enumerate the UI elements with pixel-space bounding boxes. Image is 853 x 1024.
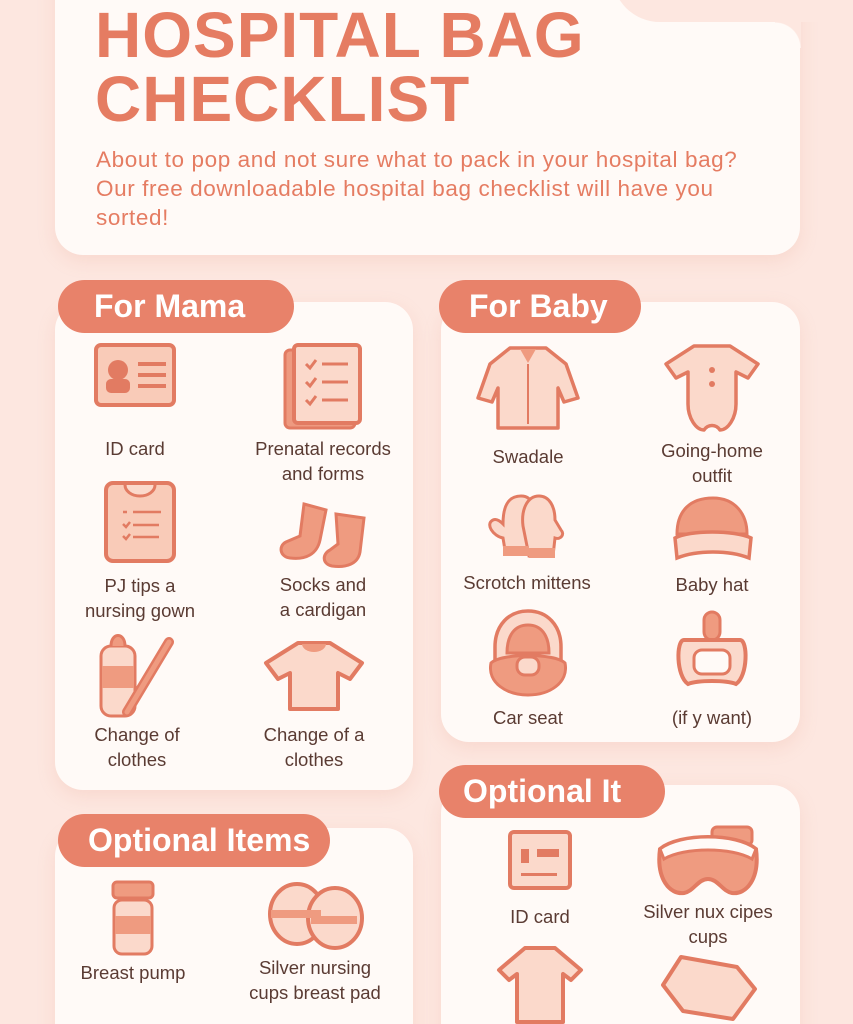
item: id card 2: ID card: [510, 906, 570, 927]
item: pj: nursing gown: [85, 600, 195, 621]
panel: optional items: [55, 828, 413, 1024]
item: prenatal records: and forms: [282, 463, 364, 484]
item: baby hat: Baby hat: [675, 574, 749, 595]
item: bottle and brush: Change of: [94, 724, 180, 745]
subtitle: About to pop and not sure what to pack in your hospital bag?: [96, 147, 737, 172]
item: baby hat: [673, 496, 753, 595]
item: shirt 2: [496, 946, 584, 1024]
header card: [55, 0, 800, 255]
title: HOSPITAL BAG: [95, 0, 585, 71]
item: onesie: [661, 344, 763, 486]
item: pad 2: [661, 955, 757, 1021]
title: CHECKLIST: [95, 63, 470, 135]
item: t-shirt: Change of a: [264, 724, 364, 745]
item: eye mask: cups: [688, 926, 728, 947]
tab: for baby: [439, 280, 641, 333]
tab: optional items: [58, 814, 330, 867]
tab: optional it: Optional It: [463, 773, 621, 809]
item: swaddle: Swadale: [493, 446, 563, 467]
item: socks: Socks and: [280, 574, 366, 595]
item: prenatal records: Prenatal records: [255, 438, 391, 459]
item: id card: [94, 343, 176, 459]
item: id card: ID card: [105, 438, 165, 459]
item: onesie: Going-home: [661, 440, 763, 461]
tab: optional items: Optional Items: [88, 822, 310, 858]
item: swaddle: [476, 346, 580, 467]
item: bottle and brush: clothes: [108, 749, 166, 770]
tab: for mama: [58, 280, 294, 333]
item: t-shirt: [264, 641, 364, 770]
tab: for baby: For Baby: [469, 288, 608, 324]
panel: for mama: [55, 302, 413, 790]
panel: for baby: [441, 302, 800, 742]
panel: optional it: [441, 785, 800, 1024]
item: id card 2: [508, 830, 572, 927]
item: bottle and brush: [94, 634, 180, 770]
tab: for mama: For Mama: [94, 288, 245, 324]
item: eye mask: Silver nux cipes: [643, 901, 773, 922]
item: car seat: Car seat: [493, 707, 563, 728]
subtitle: Our free downloadable hospital bag checklist will have you: [96, 176, 714, 201]
item: nursing pads: [249, 882, 381, 1003]
tab: optional it: [439, 765, 665, 818]
item: pacifier: (if y want): [672, 707, 752, 728]
item: pacifier: [672, 610, 752, 728]
item: mittens: Scrotch mittens: [463, 572, 591, 593]
item: breast pump: [81, 880, 185, 983]
item: t-shirt: clothes: [285, 749, 343, 770]
item: breast pump: Breast pump: [81, 962, 185, 983]
item: eye mask: [643, 826, 773, 947]
item: nursing pads: cups breast pad: [249, 982, 381, 1003]
item: nursing pads: Silver nursing: [259, 957, 371, 978]
item: pj: PJ tips a: [105, 575, 175, 596]
item: onesie: outfit: [692, 465, 732, 486]
item: prenatal records: [255, 343, 391, 484]
item: socks: a cardigan: [280, 599, 366, 620]
title: [95, 0, 585, 135]
item: mittens: [463, 494, 591, 593]
subtitle: [96, 147, 737, 230]
item: socks: [280, 502, 366, 620]
subtitle: sorted!: [96, 205, 169, 230]
item: car seat: [489, 609, 567, 728]
item: pj: [85, 481, 195, 621]
